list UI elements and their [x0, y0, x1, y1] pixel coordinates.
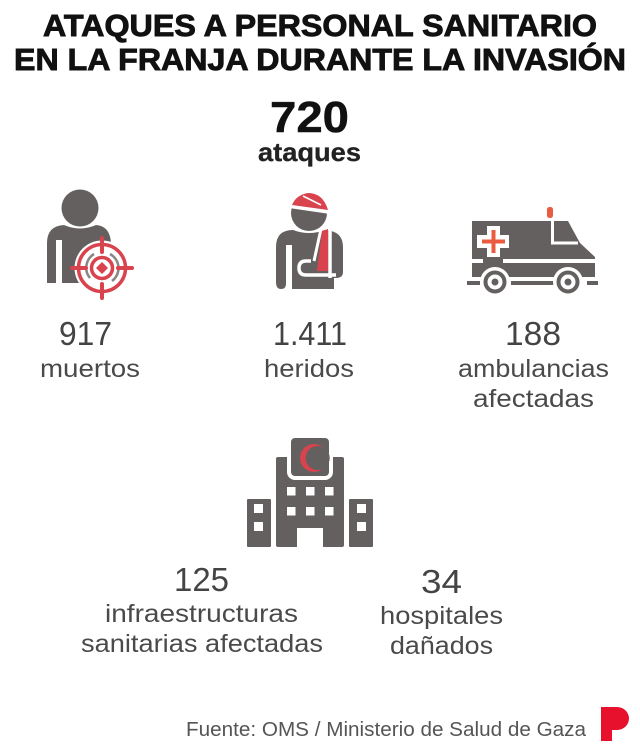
- stat: muertos: [40, 315, 140, 383]
- icon: person with target: [47, 190, 132, 298]
- stat: heridos: 1.411: [273, 315, 347, 352]
- title: ATAQUES A PERSONAL SANITARIO: [43, 8, 597, 43]
- stat: ambulancias: afectadas: [473, 385, 594, 413]
- logo: [601, 707, 629, 741]
- stat: infraestructuras: infraestructuras: [105, 600, 298, 628]
- icon: injured person: [276, 193, 343, 289]
- stat: hospitales: hospitales: [380, 602, 503, 630]
- stat: muertos: 917: [59, 315, 112, 352]
- icon: hospital: [247, 436, 373, 547]
- stat: infraestructuras: 125: [174, 561, 229, 598]
- title: [14, 8, 626, 77]
- total attacks: [258, 93, 361, 167]
- stat: heridos: heridos: [264, 355, 354, 383]
- total attacks: 720: [270, 93, 349, 142]
- total attacks: ataques: [258, 137, 361, 167]
- source: Fuente: OMS / Ministerio de Salud de Gaza: [186, 719, 587, 741]
- stat: ambulancias: 188: [505, 315, 561, 352]
- stat: hospitales: 34: [421, 563, 462, 600]
- stat: infraestructuras: [81, 561, 323, 658]
- icon: ambulance: [467, 207, 598, 297]
- stat: ambulancias: ambulancias: [458, 355, 609, 383]
- stat: muertos: muertos: [40, 355, 140, 383]
- stat: infraestructuras: sanitarias afectadas: [81, 630, 323, 658]
- stat: hospitales: dañados: [390, 632, 493, 660]
- stat: heridos: [264, 315, 354, 383]
- stat: ambulancias: [458, 315, 609, 413]
- stat: hospitales: [380, 563, 503, 660]
- title: EN LA FRANJA DURANTE LA INVASIÓN: [14, 41, 626, 77]
